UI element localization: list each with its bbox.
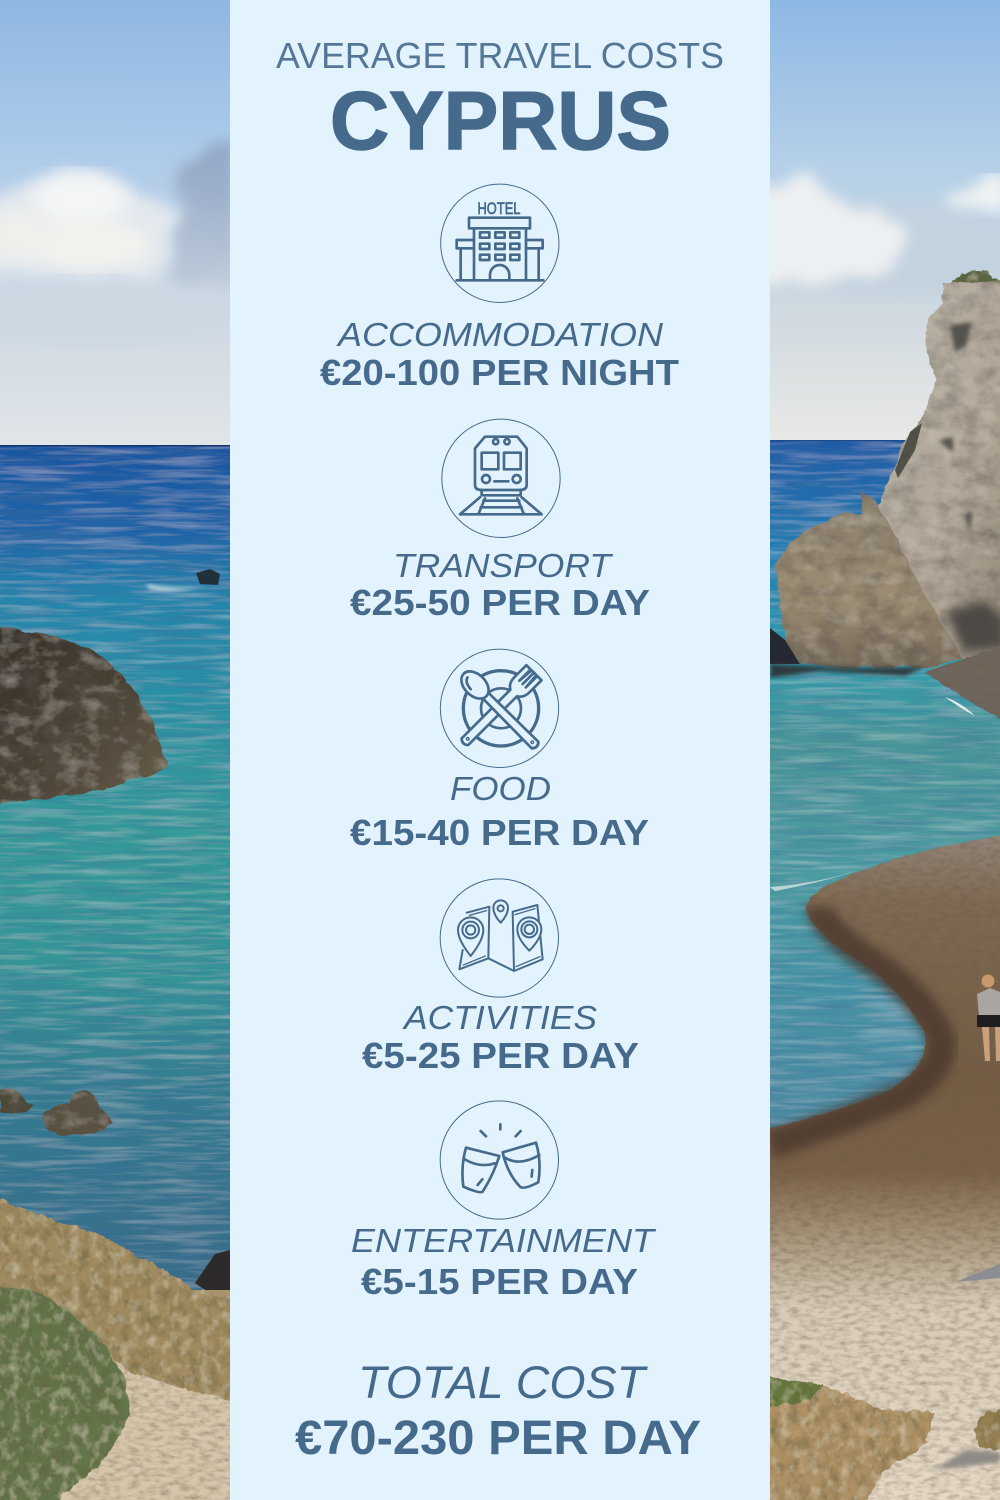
icon: activities map bbox=[440, 879, 558, 997]
rock bbox=[775, 490, 963, 668]
wave line bbox=[770, 862, 880, 891]
label: accommodation: ACCOMMODATION bbox=[336, 316, 663, 353]
label: transport: TRANSPORT bbox=[393, 547, 614, 584]
sea bbox=[0, 445, 230, 1305]
value: food cost: €15-40 PER DAY bbox=[350, 812, 649, 853]
dry shrubs bbox=[760, 1375, 1000, 1500]
title: average travel costs: AVERAGE TRAVEL COSTS bbox=[276, 35, 724, 76]
ground base bbox=[48, 1290, 230, 1397]
label: activities: ACTIVITIES bbox=[402, 999, 597, 1036]
photo: left side of Cyprus coast bbox=[0, 0, 250, 1500]
dark seaweed band bbox=[770, 907, 942, 1145]
shadow bbox=[955, 1264, 1000, 1282]
icon: food bbox=[440, 649, 559, 767]
dry grass bbox=[0, 1195, 240, 1402]
sky bbox=[770, 0, 1000, 441]
person bbox=[977, 974, 1000, 1061]
icon: hotel: HOTEL bbox=[477, 199, 520, 218]
label: total cost: TOTAL COST bbox=[358, 1357, 649, 1408]
dark gravel bbox=[925, 645, 1000, 722]
panel: cost list bbox=[230, 0, 770, 1500]
beach bbox=[760, 834, 1000, 1500]
value: accommodation cost: €20-100 PER NIGHT bbox=[320, 352, 679, 393]
sky bbox=[0, 0, 230, 446]
value: total cost: €70-230 PER DAY bbox=[295, 1412, 701, 1465]
clouds bbox=[755, 180, 1000, 295]
label: entertainment: ENTERTAINMENT bbox=[351, 1222, 657, 1259]
green shrub bbox=[0, 1285, 130, 1500]
sea bbox=[770, 440, 1000, 1160]
sandy ground bbox=[60, 1354, 230, 1500]
value: transport cost: €25-50 PER DAY bbox=[350, 582, 650, 623]
clouds bbox=[0, 138, 230, 285]
shoreline rock bbox=[195, 1250, 230, 1290]
value: entertainment cost: €5-15 PER DAY bbox=[361, 1261, 638, 1302]
small rocks bbox=[0, 569, 220, 1134]
cliff bbox=[870, 270, 1000, 660]
icon: train bbox=[442, 419, 560, 537]
icon: clinking glasses bbox=[440, 1101, 558, 1219]
photo: right side of Cyprus coast bbox=[755, 0, 1000, 1500]
big rock bbox=[0, 628, 167, 806]
value: activities cost: €5-25 PER DAY bbox=[362, 1035, 639, 1076]
title: Cyprus: CYPRUS bbox=[330, 74, 671, 167]
icon: hotel bbox=[441, 184, 559, 302]
label: food: FOOD bbox=[450, 770, 551, 807]
